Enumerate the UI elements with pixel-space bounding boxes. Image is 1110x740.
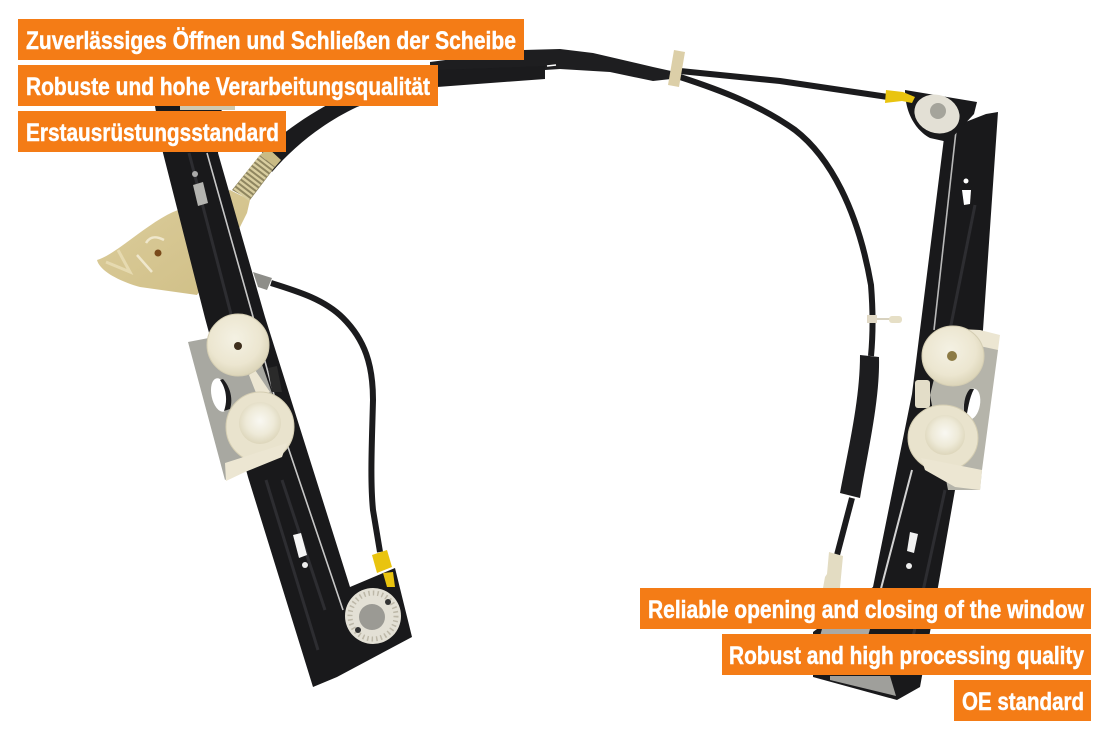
left slider pulleys xyxy=(207,314,294,481)
right top pulley xyxy=(909,88,965,140)
connector bottom xyxy=(823,552,843,588)
labels: German xyxy=(18,19,524,152)
label: OE standard DE: Erstausrüstungsstandard xyxy=(26,119,279,147)
label: reliable operation DE xyxy=(18,19,524,60)
left rail xyxy=(155,106,412,687)
cables: main bundle xyxy=(262,49,888,555)
label: build quality EN xyxy=(722,634,1091,675)
cable clip xyxy=(668,50,902,323)
spring xyxy=(232,148,281,200)
right slider plate xyxy=(930,330,998,490)
right rail xyxy=(813,112,998,700)
label: build quality DE: Robuste und hohe Verarbeitungsqualität xyxy=(26,73,431,101)
motor mount xyxy=(97,190,250,295)
left slider plate xyxy=(188,330,290,480)
label: OE standard DE xyxy=(18,111,286,152)
right plate slot xyxy=(961,387,983,421)
labels: English xyxy=(640,588,1091,721)
label: OE standard EN xyxy=(954,680,1091,721)
plate slot xyxy=(208,377,232,413)
right top bracket xyxy=(905,90,977,142)
label: reliable operation EN xyxy=(640,588,1091,629)
right slider pulleys xyxy=(908,326,1000,490)
label: build quality DE xyxy=(18,65,438,106)
small cable end xyxy=(253,272,272,290)
right yellow connector xyxy=(885,90,915,103)
label: reliable operation DE: Zuverlässiges Öffnen und Schließen der Scheibe xyxy=(26,26,516,55)
label: OE standard EN: OE standard xyxy=(962,688,1084,716)
cable sleeve xyxy=(840,355,879,498)
product: window regulator xyxy=(97,49,1000,700)
left yellow connector xyxy=(372,550,395,587)
left bottom pulley xyxy=(345,588,401,644)
